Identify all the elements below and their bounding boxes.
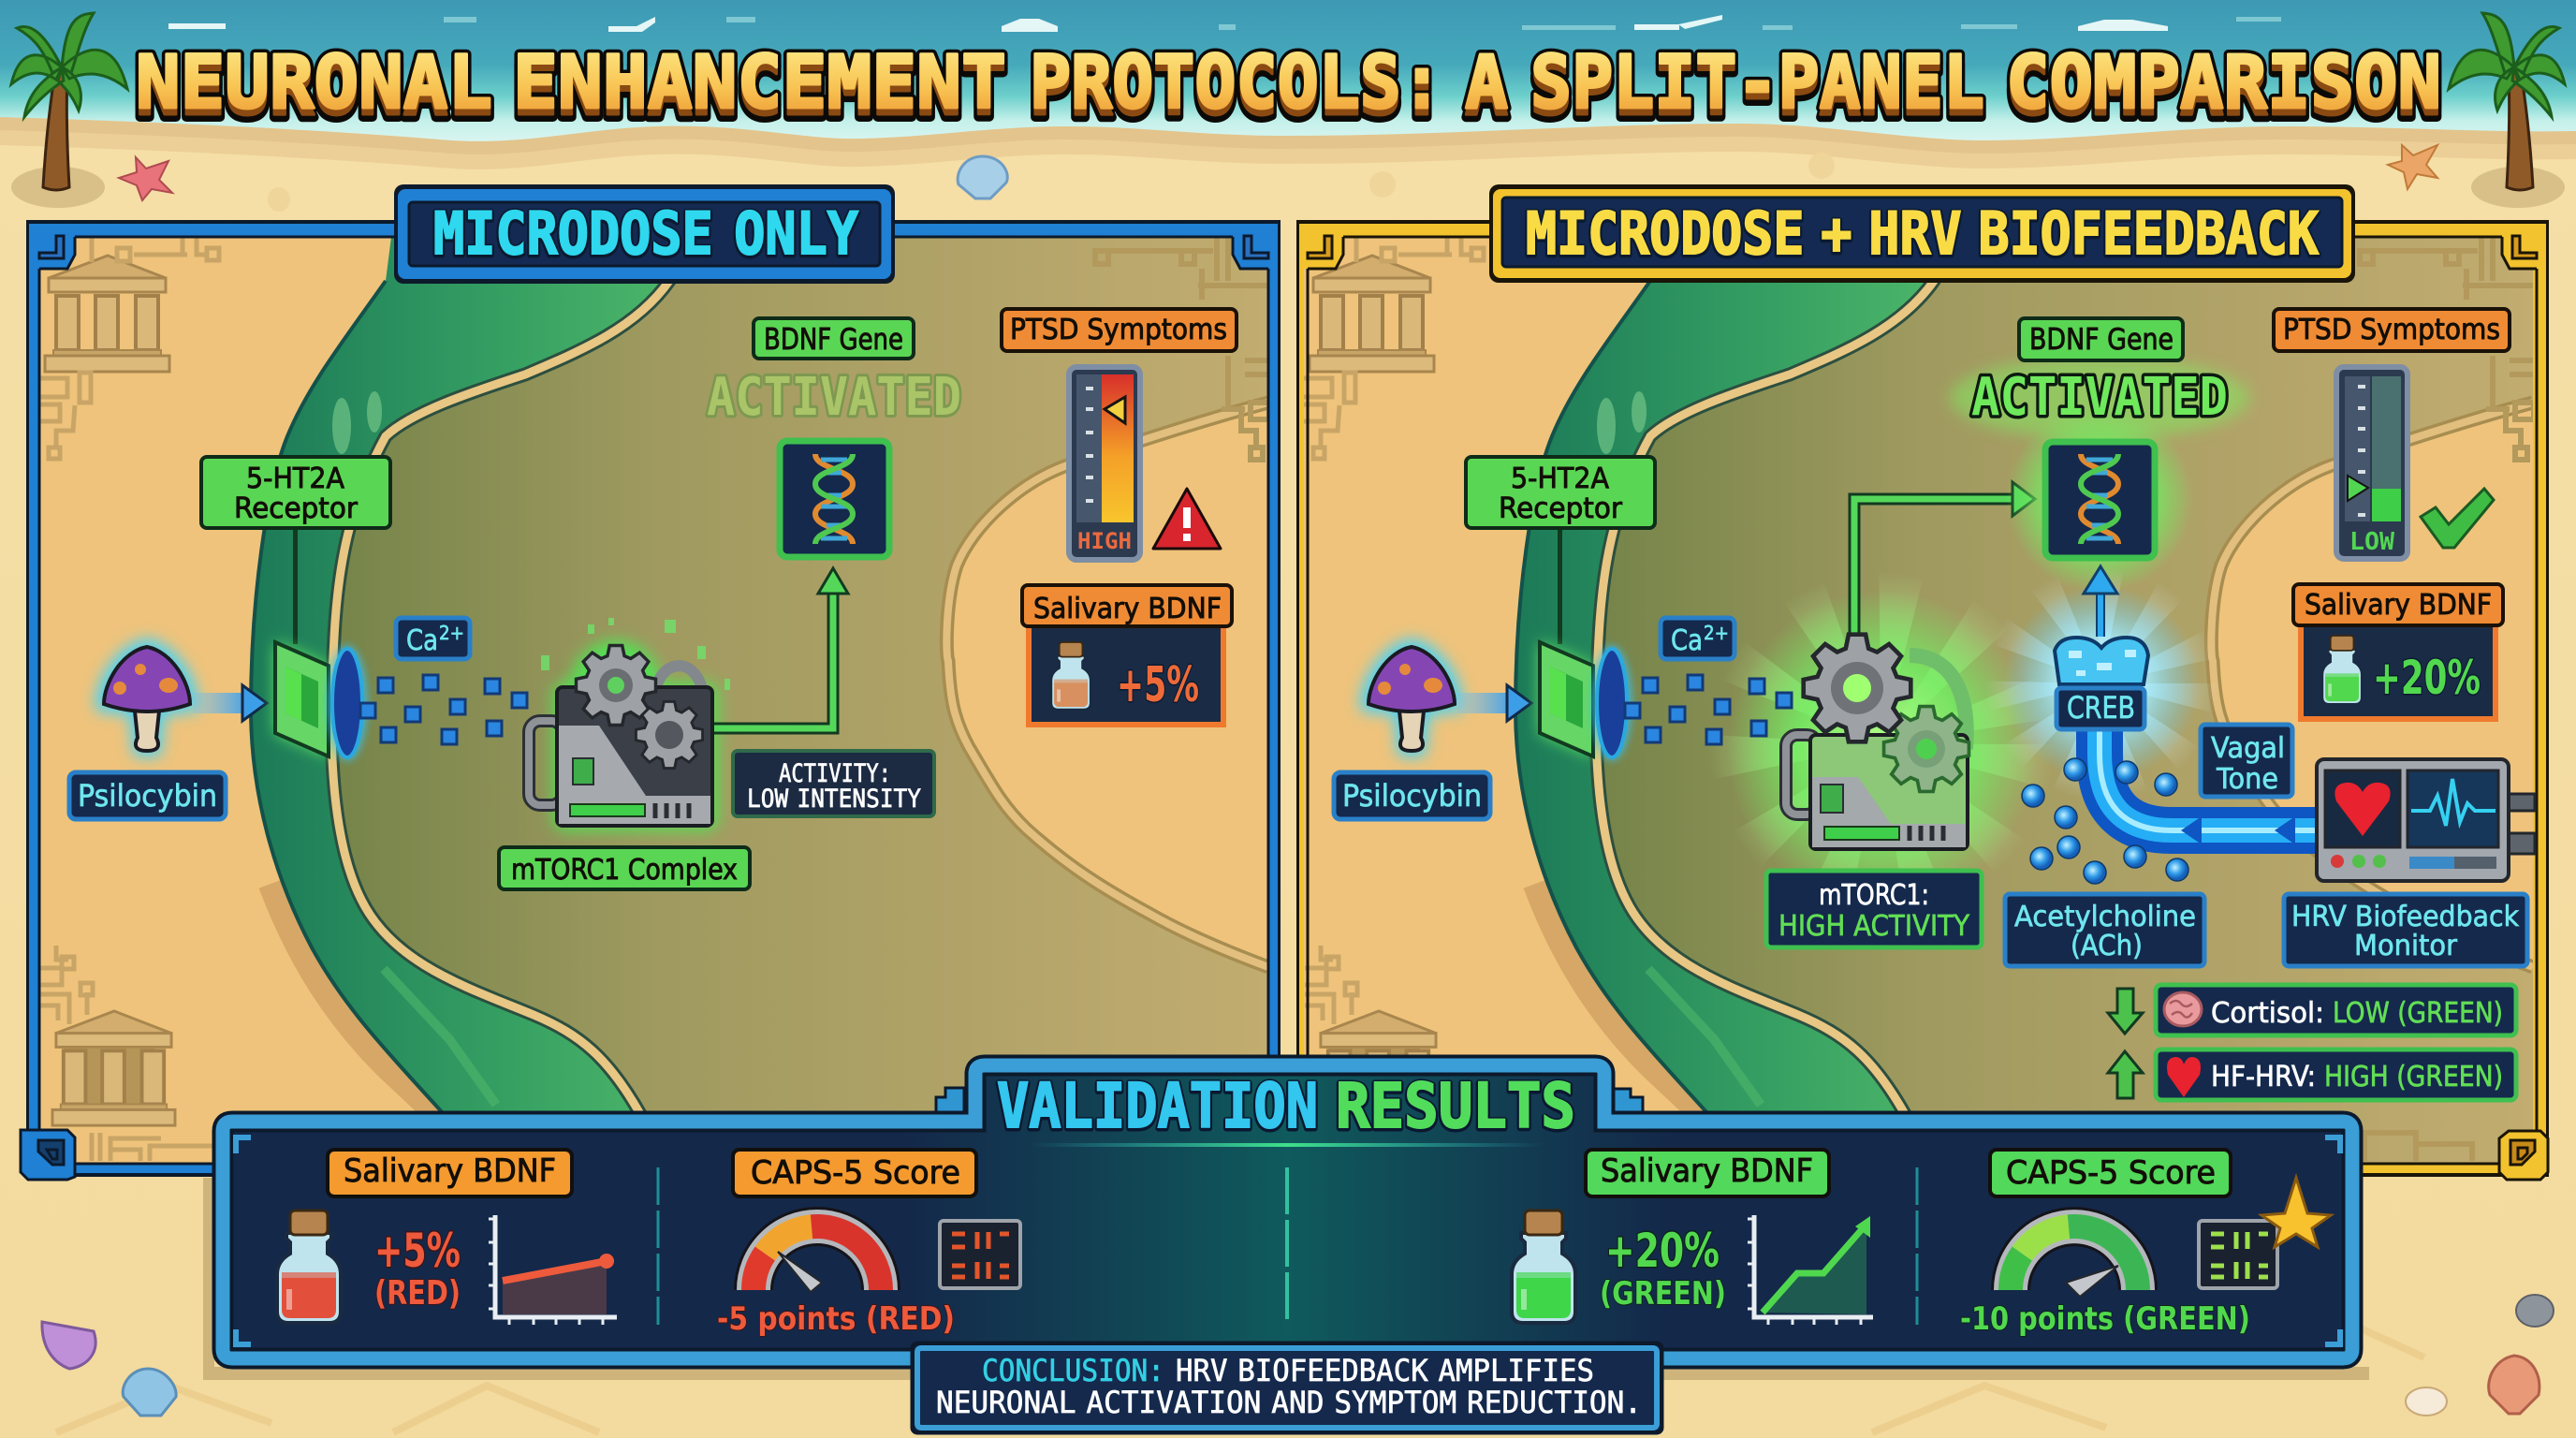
- icon: CAPS-5 panel treatment: [2199, 1221, 2277, 1288]
- icon: HRV monitor: [2317, 759, 2535, 881]
- connector: receptor stem: [293, 530, 298, 644]
- label: mTORC1 high activity: [1766, 871, 1982, 947]
- callout: conclusion: CONCLUSION:: [982, 1353, 1164, 1388]
- label: activity low intensity: ACTIVITY:: [779, 759, 891, 788]
- callout: conclusion: [913, 1343, 1661, 1432]
- arrow: mTORC1 to BDNF gene: [1854, 482, 2035, 637]
- label: HRV biofeedback monitor: Monitor: [2354, 930, 2458, 962]
- gauge: PTSD high: HIGH: [1077, 528, 1132, 554]
- label: salivary BDNF treatment: Salivary BDNF: [1601, 1152, 1813, 1190]
- label: calcium: Ca: [406, 624, 438, 657]
- icon: CREB molecule: [2055, 638, 2148, 684]
- card: salivary BDNF result: Salivary BDNF: [1033, 593, 1222, 625]
- heading: microdose only: MICRODOSE ONLY: [433, 199, 859, 268]
- label: activity low intensity: [733, 751, 934, 816]
- icon: white pebble: [2406, 1387, 2447, 1416]
- icon: calcium particles: [360, 675, 527, 744]
- label: mTORC1 high activity: mTORC1:: [1819, 879, 1929, 912]
- heading: microdose only: [394, 184, 895, 284]
- label: vagal tone: [2201, 725, 2292, 797]
- heading: validation results: [997, 1070, 1575, 1143]
- badge: cortisol: LOW (GREEN): [2333, 997, 2503, 1030]
- icon: blue shell bottom: [123, 1369, 176, 1416]
- label: BDNF gene: BDNF Gene: [764, 323, 903, 357]
- label: mTORC1 complex: mTORC1 Complex: [511, 854, 738, 887]
- label: acetylcholine: Acetylcholine: [2014, 901, 2196, 933]
- icon: calcium channel: [327, 645, 368, 761]
- arrow: psilocybin to receptor: [193, 685, 267, 721]
- label: CREB: CREB: [2067, 690, 2135, 726]
- badge: cortisol: [2156, 985, 2516, 1035]
- heading: microdose + HRV biofeedback: MICRODOSE + HRV BIOFEEDBACK: [1526, 200, 2320, 269]
- badge: HF-HRV: HF-HRV:: [2211, 1061, 2316, 1093]
- icon: receptor switch: [275, 642, 329, 756]
- card: salivary BDNF result: +20%: [2373, 651, 2481, 705]
- icon: orange shell: [2489, 1356, 2539, 1414]
- label: activity low intensity: LOW INTENSITY: [747, 785, 921, 814]
- gauge: CAPS-5 treatment: [2011, 1226, 2138, 1297]
- label: 5-HT2A receptor: [1466, 457, 1655, 528]
- label: CAPS-5 control: CAPS-5 Score: [751, 1154, 960, 1192]
- label: psilocybin: Psilocybin: [1342, 778, 1482, 814]
- arrow: psilocybin to receptor: [1457, 685, 1531, 721]
- label: mTORC1 high activity: HIGH ACTIVITY: [1778, 910, 1970, 943]
- label: calcium: 2+: [1704, 622, 1729, 644]
- icon: DNA: [2045, 442, 2155, 558]
- value: +20% green: +20%: [1605, 1224, 1720, 1278]
- card: salivary BDNF result: [1022, 585, 1232, 725]
- panel: microdose + HRV biofeedback: [1296, 184, 2549, 1180]
- heading: validation results: RESULTS: [1336, 1071, 1575, 1143]
- value: +5% red: [374, 1224, 461, 1313]
- value: -10 points green: -10 points (GREEN): [1960, 1300, 2250, 1338]
- label: calcium: Ca: [1671, 624, 1703, 657]
- gauge: CAPS-5 control: [754, 1226, 881, 1292]
- icon: calcium particles: [1625, 675, 1792, 744]
- text: activated faded: ACTIVATED: [707, 367, 961, 428]
- card: salivary BDNF result: [2293, 584, 2503, 719]
- icon: pink starfish: [119, 157, 172, 200]
- panel: microdose only: [21, 184, 1281, 1180]
- label: CAPS-5 treatment: CAPS-5 Score: [2006, 1154, 2216, 1192]
- icon: receptor switch: [1540, 642, 1593, 756]
- title: [136, 41, 2441, 135]
- glow: DNA and activated text: [1950, 357, 2249, 593]
- label: acetylcholine: [2005, 894, 2204, 966]
- label: vagal tone: Vagal: [2211, 732, 2285, 765]
- heading: microdose + HRV biofeedback: MICRODOSE + HRV BIOFEEDBACK: [1526, 199, 2320, 268]
- callout: conclusion: HRV BIOFEEDBACK AMPLIFIES: [1176, 1353, 1594, 1388]
- label: calcium: [1661, 618, 1734, 659]
- icon: CAPS-5 panel control: [940, 1221, 1020, 1288]
- connector: receptor stem: [1558, 530, 1562, 644]
- icon: calcium channel: [1591, 645, 1632, 761]
- icon: check mark: [2421, 489, 2494, 548]
- icon: DNA: [780, 441, 889, 557]
- label: HRV biofeedback monitor: [2284, 894, 2527, 966]
- label: 5-HT2A receptor: 5-HT2A: [246, 462, 344, 495]
- badge: HF-HRV: [2156, 1049, 2516, 1100]
- label: psilocybin: Psilocybin: [78, 778, 217, 814]
- card: salivary BDNF result: +5%: [1117, 657, 1199, 713]
- label: acetylcholine: (ACh): [2071, 930, 2143, 962]
- icon: orange starfish: [2388, 145, 2437, 189]
- icon: up arrow: [2108, 1051, 2143, 1098]
- glow: mTORC1 burst: [1727, 590, 2036, 908]
- label: vagal tone: Tone: [2216, 763, 2278, 796]
- glow: CREB burst: [2003, 585, 2200, 782]
- chart: BDNF small rise: [489, 1215, 617, 1325]
- gauge: PTSD low: [2336, 367, 2408, 559]
- heading: validation results: VALIDATION: [997, 1070, 1318, 1142]
- label: calcium: 2+: [439, 622, 464, 644]
- badge: HF-HRV: HIGH (GREEN): [2324, 1061, 2503, 1093]
- icon: vagal pipe: [2100, 726, 2321, 844]
- icon: acetylcholine bubbles: [2022, 758, 2188, 884]
- panel: validation results: [203, 1065, 2369, 1380]
- card: salivary BDNF result: Salivary BDNF: [2305, 589, 2492, 622]
- arrow: mTORC1 to BDNF gene: [714, 568, 848, 728]
- icon: green vial: [1512, 1211, 1575, 1323]
- label: calcium: [396, 618, 470, 659]
- icon: mushroom: [101, 644, 193, 751]
- label: PTSD symptoms: PTSD Symptoms: [2283, 314, 2500, 346]
- gauge: PTSD low: LOW: [2349, 528, 2394, 556]
- icon: mTORC1 machine high activity: [1786, 635, 1969, 849]
- palm tree right: [2449, 13, 2565, 208]
- value: -5 points red: -5 points (RED): [717, 1300, 955, 1338]
- label: HRV biofeedback monitor: HRV Biofeedback: [2291, 901, 2520, 933]
- text: activated: ACTIVATED: [1971, 367, 2228, 428]
- value: +20% green: [1600, 1224, 1726, 1313]
- label: salivary BDNF control: Salivary BDNF: [344, 1152, 556, 1190]
- label: 5-HT2A receptor: Receptor: [234, 492, 359, 525]
- label: 5-HT2A receptor: Receptor: [1499, 492, 1623, 525]
- heading: microdose + HRV biofeedback: [1489, 184, 2355, 283]
- gauge: PTSD high: [1069, 367, 1140, 560]
- icon: blue shell top: [958, 156, 1007, 198]
- label: PTSD symptoms: PTSD Symptoms: [1010, 314, 1227, 346]
- value: +5% red: +5%: [374, 1224, 461, 1278]
- label: 5-HT2A receptor: [201, 457, 390, 528]
- label: 5-HT2A receptor: 5-HT2A: [1511, 462, 1609, 495]
- icon: mushroom: [1366, 644, 1457, 751]
- value: +5% red: (RED): [374, 1274, 461, 1313]
- heading: microdose only: MICRODOSE ONLY: [433, 200, 859, 269]
- icon: gold star: [2261, 1178, 2331, 1247]
- callout: conclusion: NEURONAL ACTIVATION AND SYMPTOM REDUCTION.: [936, 1385, 1642, 1420]
- icon: purple shell: [42, 1322, 95, 1369]
- icon: red vial: [277, 1211, 341, 1323]
- heading: validation results: VALIDATION: [997, 1071, 1318, 1143]
- value: +20% green: (GREEN): [1600, 1275, 1726, 1313]
- chart: BDNF strong rise: [1748, 1215, 1873, 1325]
- label: BDNF gene: BDNF Gene: [2029, 323, 2174, 357]
- badge: cortisol: Cortisol:: [2211, 997, 2324, 1030]
- arrow: CREB to DNA: [2084, 566, 2117, 637]
- icon: down arrow: [2108, 989, 2143, 1034]
- heading: validation results: RESULTS: [1336, 1070, 1575, 1142]
- icon: mTORC1 machine low activity: [529, 618, 730, 831]
- palm tree left: [11, 13, 127, 208]
- icon: grey pebble: [2516, 1295, 2554, 1327]
- icon: warning triangle: [1153, 489, 1221, 549]
- background: ocean: [0, 0, 2576, 154]
